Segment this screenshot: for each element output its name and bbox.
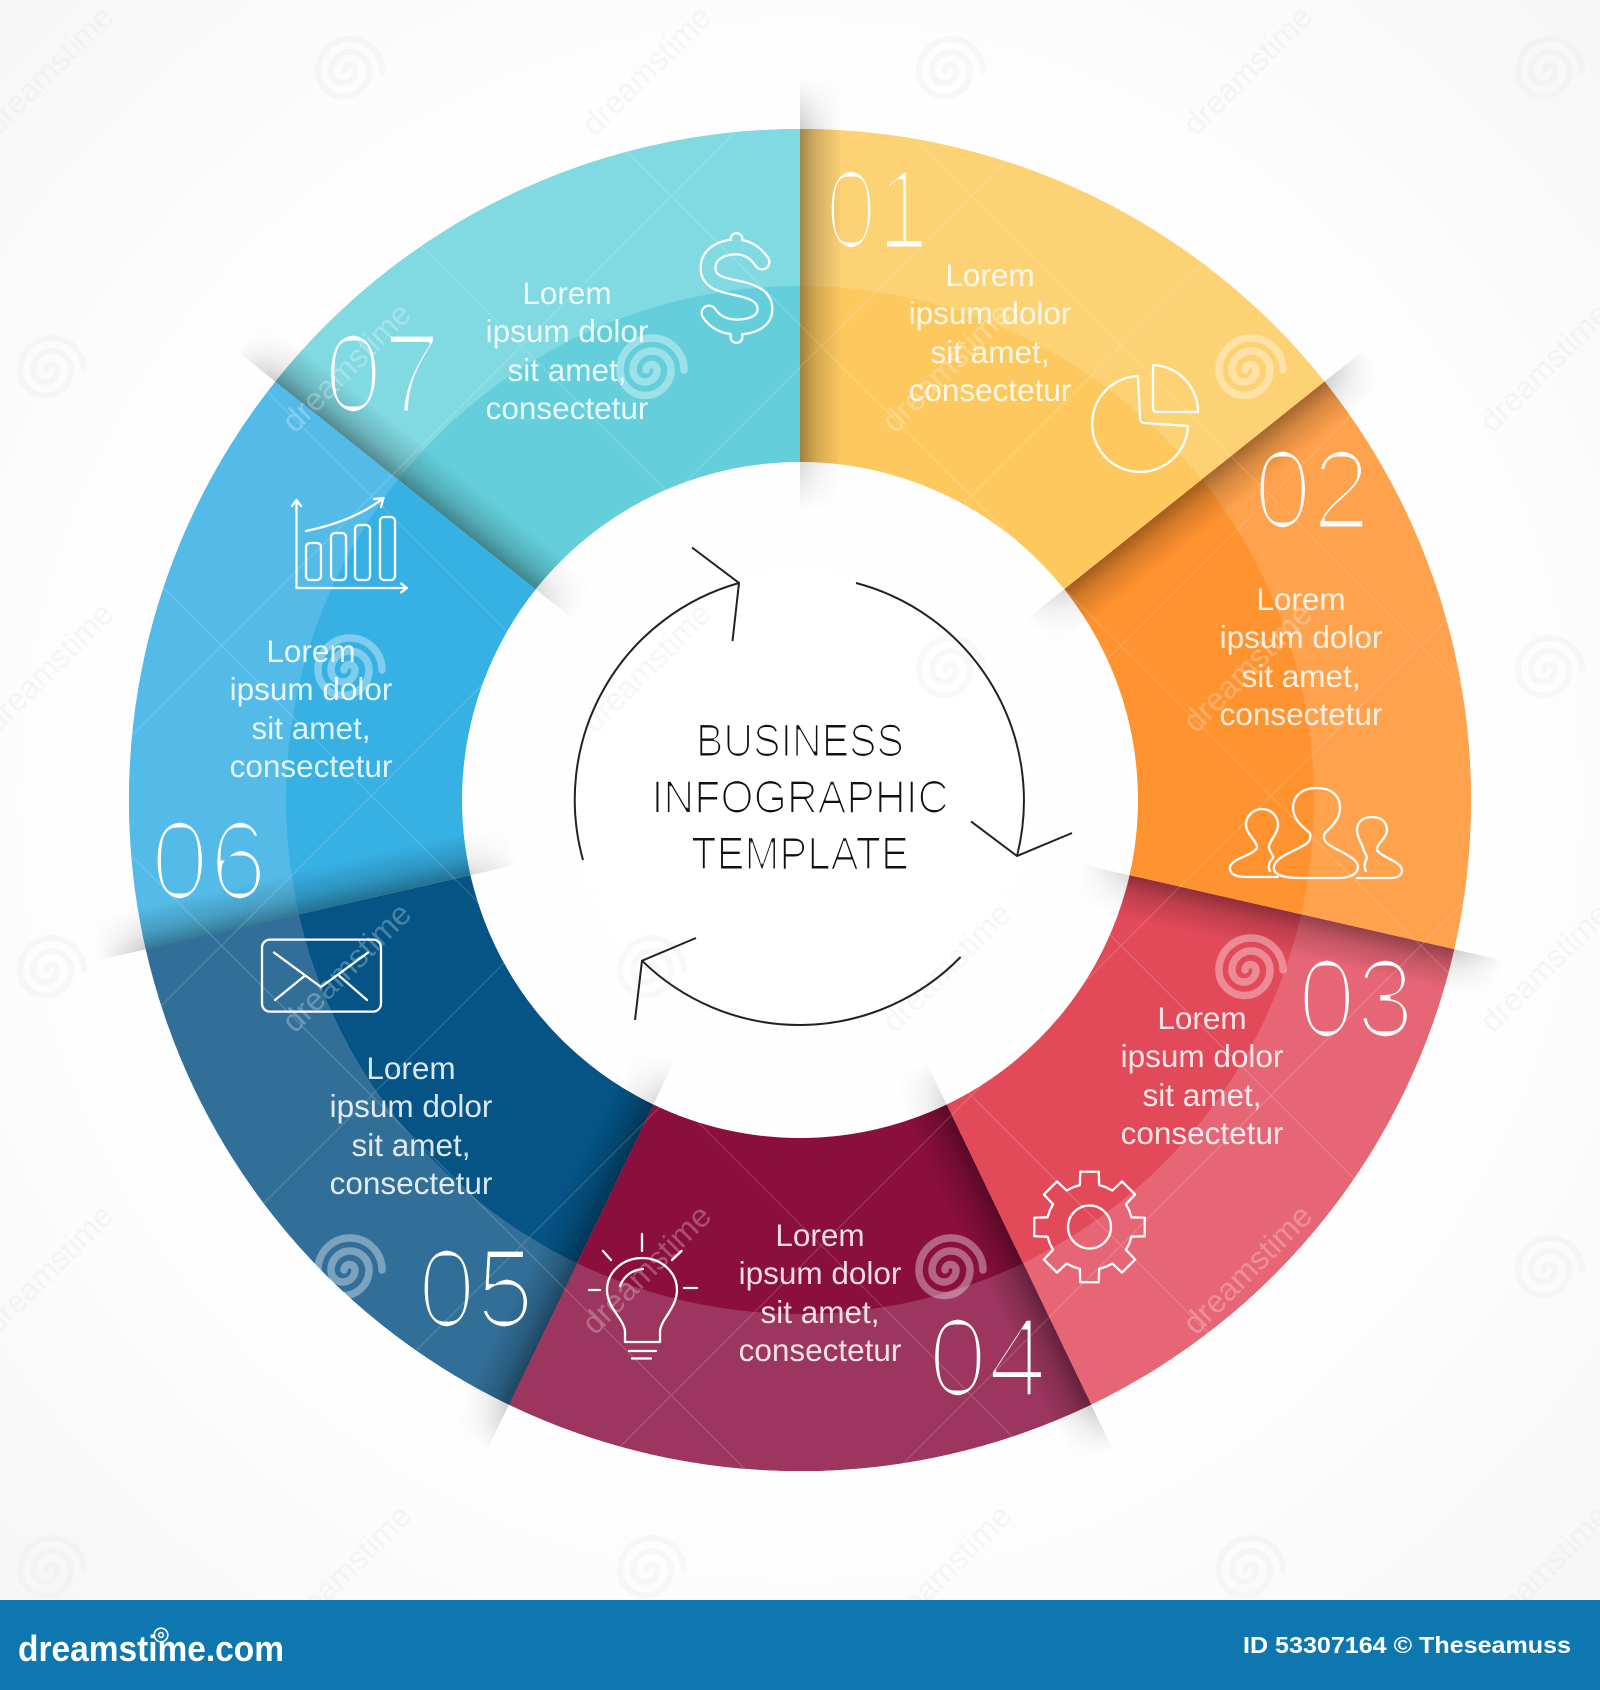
arrow: cycle right [856,583,1072,856]
text 05: ipsum dolor [330,1088,492,1124]
text 03: consectetur [1121,1115,1283,1151]
text 04: ipsum dolor [739,1255,901,1291]
footer credit: ID 53307164 © Theseamuss [1243,1632,1571,1658]
text 02: Lorem [1256,581,1346,617]
content: segment 02 [1220,428,1402,878]
icon: light bulb [589,1234,697,1358]
text 05: consectetur [330,1165,492,1201]
text 03: sit amet, [1142,1077,1262,1113]
content: segment 07 [324,239,765,436]
icon: gear [1034,1172,1145,1282]
watermark: faint background marks: dreamstime [874,895,1018,1039]
text 06: ipsum dolor [230,671,392,707]
footer logo: dreamstime.com [18,1628,284,1669]
text 01: Lorem [945,257,1035,293]
panel: segment 01 yellow [800,129,1325,589]
text 07: ipsum dolor [486,313,648,349]
text 02: consectetur [1220,696,1382,732]
panel: segment 06 blue [129,382,536,949]
title: TEMPLATE [691,828,909,879]
text 04: sit amet, [760,1294,880,1330]
text 05: Lorem [366,1050,456,1086]
arrow: cycle bottom [635,938,961,1025]
icon: people [1230,788,1402,878]
content: segment 06 [150,498,407,923]
number 05: 05 [418,1227,534,1351]
text 04: Lorem [775,1217,865,1253]
watermark: marks over ring [129,129,1471,1471]
footer bar [0,1600,1600,1690]
panel: segment 05 navy [146,875,653,1405]
watermark: marks over ring: dreamstime [274,295,418,439]
icon: bar chart [292,498,407,592]
text 02: ipsum dolor [1220,619,1382,655]
panel: segment 02 orange [1064,382,1471,949]
title [652,715,948,879]
text 01: consectetur [909,372,1071,408]
watermark: marks over ring: dreamstime [874,295,1018,439]
icon: dollar sign [708,239,765,337]
text 07: Lorem [522,275,612,311]
icon: pie chart [1092,365,1198,472]
icon: envelope [262,940,381,1012]
content: segment 01 [825,148,1198,472]
title: INFOGRAPHIC [652,772,948,822]
text 03: Lorem [1157,1000,1247,1036]
number 03: 03 [1298,937,1414,1061]
overlap shadows between segments [74,65,1517,1480]
text 07: sit amet, [507,352,627,388]
text 01: sit amet, [930,334,1050,370]
watermark: faint background marks: dreamstime [274,1497,418,1641]
text 06: consectetur [230,748,392,784]
text 03: ipsum dolor [1121,1038,1283,1074]
watermark: faint background marks: dreamstime [574,595,718,739]
content: segment 03 [1034,937,1414,1282]
text 01: ipsum dolor [909,295,1071,331]
number 04: 04 [928,1296,1047,1420]
number 06: 06 [150,799,268,923]
arrow: cycle left [575,548,739,860]
title: BUSINESS [696,715,904,766]
text 05: sit amet, [351,1127,471,1163]
panel: segment 03 red [947,875,1454,1405]
panel: segment 07 teal [275,129,800,589]
content: segment 05 [262,940,534,1351]
panel: segment 04 crimson [509,1104,1091,1471]
watermark: faint background marks: dreamstime [874,1497,1018,1641]
number 02: 02 [1254,428,1370,552]
content: segment 04 [589,1217,1047,1420]
text 06: Lorem [266,633,356,669]
text 04: consectetur [739,1332,901,1368]
watermark: marks over ring: dreamstime [574,1197,718,1341]
watermark: marks over ring: dreamstime [1175,1197,1319,1341]
watermark: marks over ring: dreamstime [1175,595,1319,739]
watermark: faint background marks: dreamstime [574,0,718,142]
number 01: 01 [825,148,929,272]
watermark: marks over ring: dreamstime [274,895,418,1039]
text 06: sit amet, [251,710,371,746]
text 07: consectetur [486,390,648,426]
number 07: 07 [324,312,441,436]
text 02: sit amet, [1241,658,1361,694]
watermark: faint background marks: dreamstime [1175,0,1319,142]
